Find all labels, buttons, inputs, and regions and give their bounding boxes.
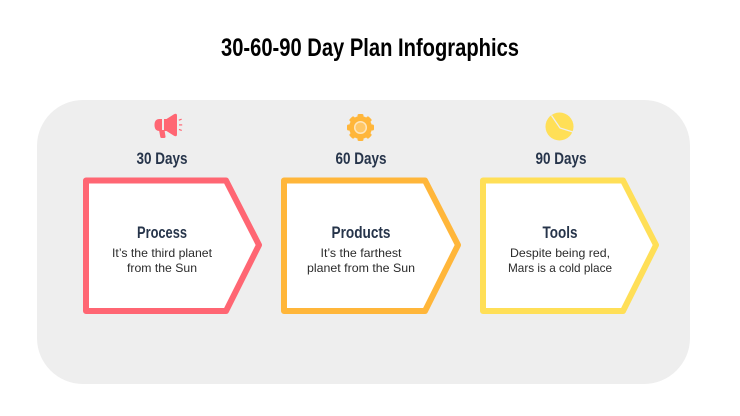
heading: Products: Products — [332, 223, 390, 242]
heading: Process: Process — [137, 223, 187, 242]
text: Products description: It’s the farthest — [320, 246, 402, 260]
text: Products description: planet from the Sun — [307, 261, 415, 275]
icon: gear — [347, 114, 374, 141]
heading: 90 Days: 90 Days — [536, 149, 586, 168]
text: Tools description: Mars is a cold place — [508, 261, 612, 275]
arrow box: Products — [284, 180, 458, 311]
heading: 60 Days: 60 Days — [336, 149, 386, 168]
text: Process description: It’s the third planet — [112, 246, 213, 260]
column: 60 days — [284, 114, 458, 311]
arrow box: Tools — [483, 180, 656, 311]
arrow box: Process — [86, 180, 259, 311]
column: 90 days — [483, 112, 656, 311]
icon: megaphone — [154, 114, 182, 138]
icon: pie chart — [546, 112, 574, 140]
column: 30 days — [86, 114, 259, 311]
heading: 30 Days: 30 Days — [136, 149, 188, 168]
panel: background — [37, 100, 690, 384]
title: 30-60-90 Day Plan Infographics — [221, 34, 519, 62]
text: Process description: from the Sun — [127, 261, 197, 275]
text: Tools description: Despite being red, — [510, 246, 610, 260]
heading: Tools: Tools — [542, 223, 578, 242]
